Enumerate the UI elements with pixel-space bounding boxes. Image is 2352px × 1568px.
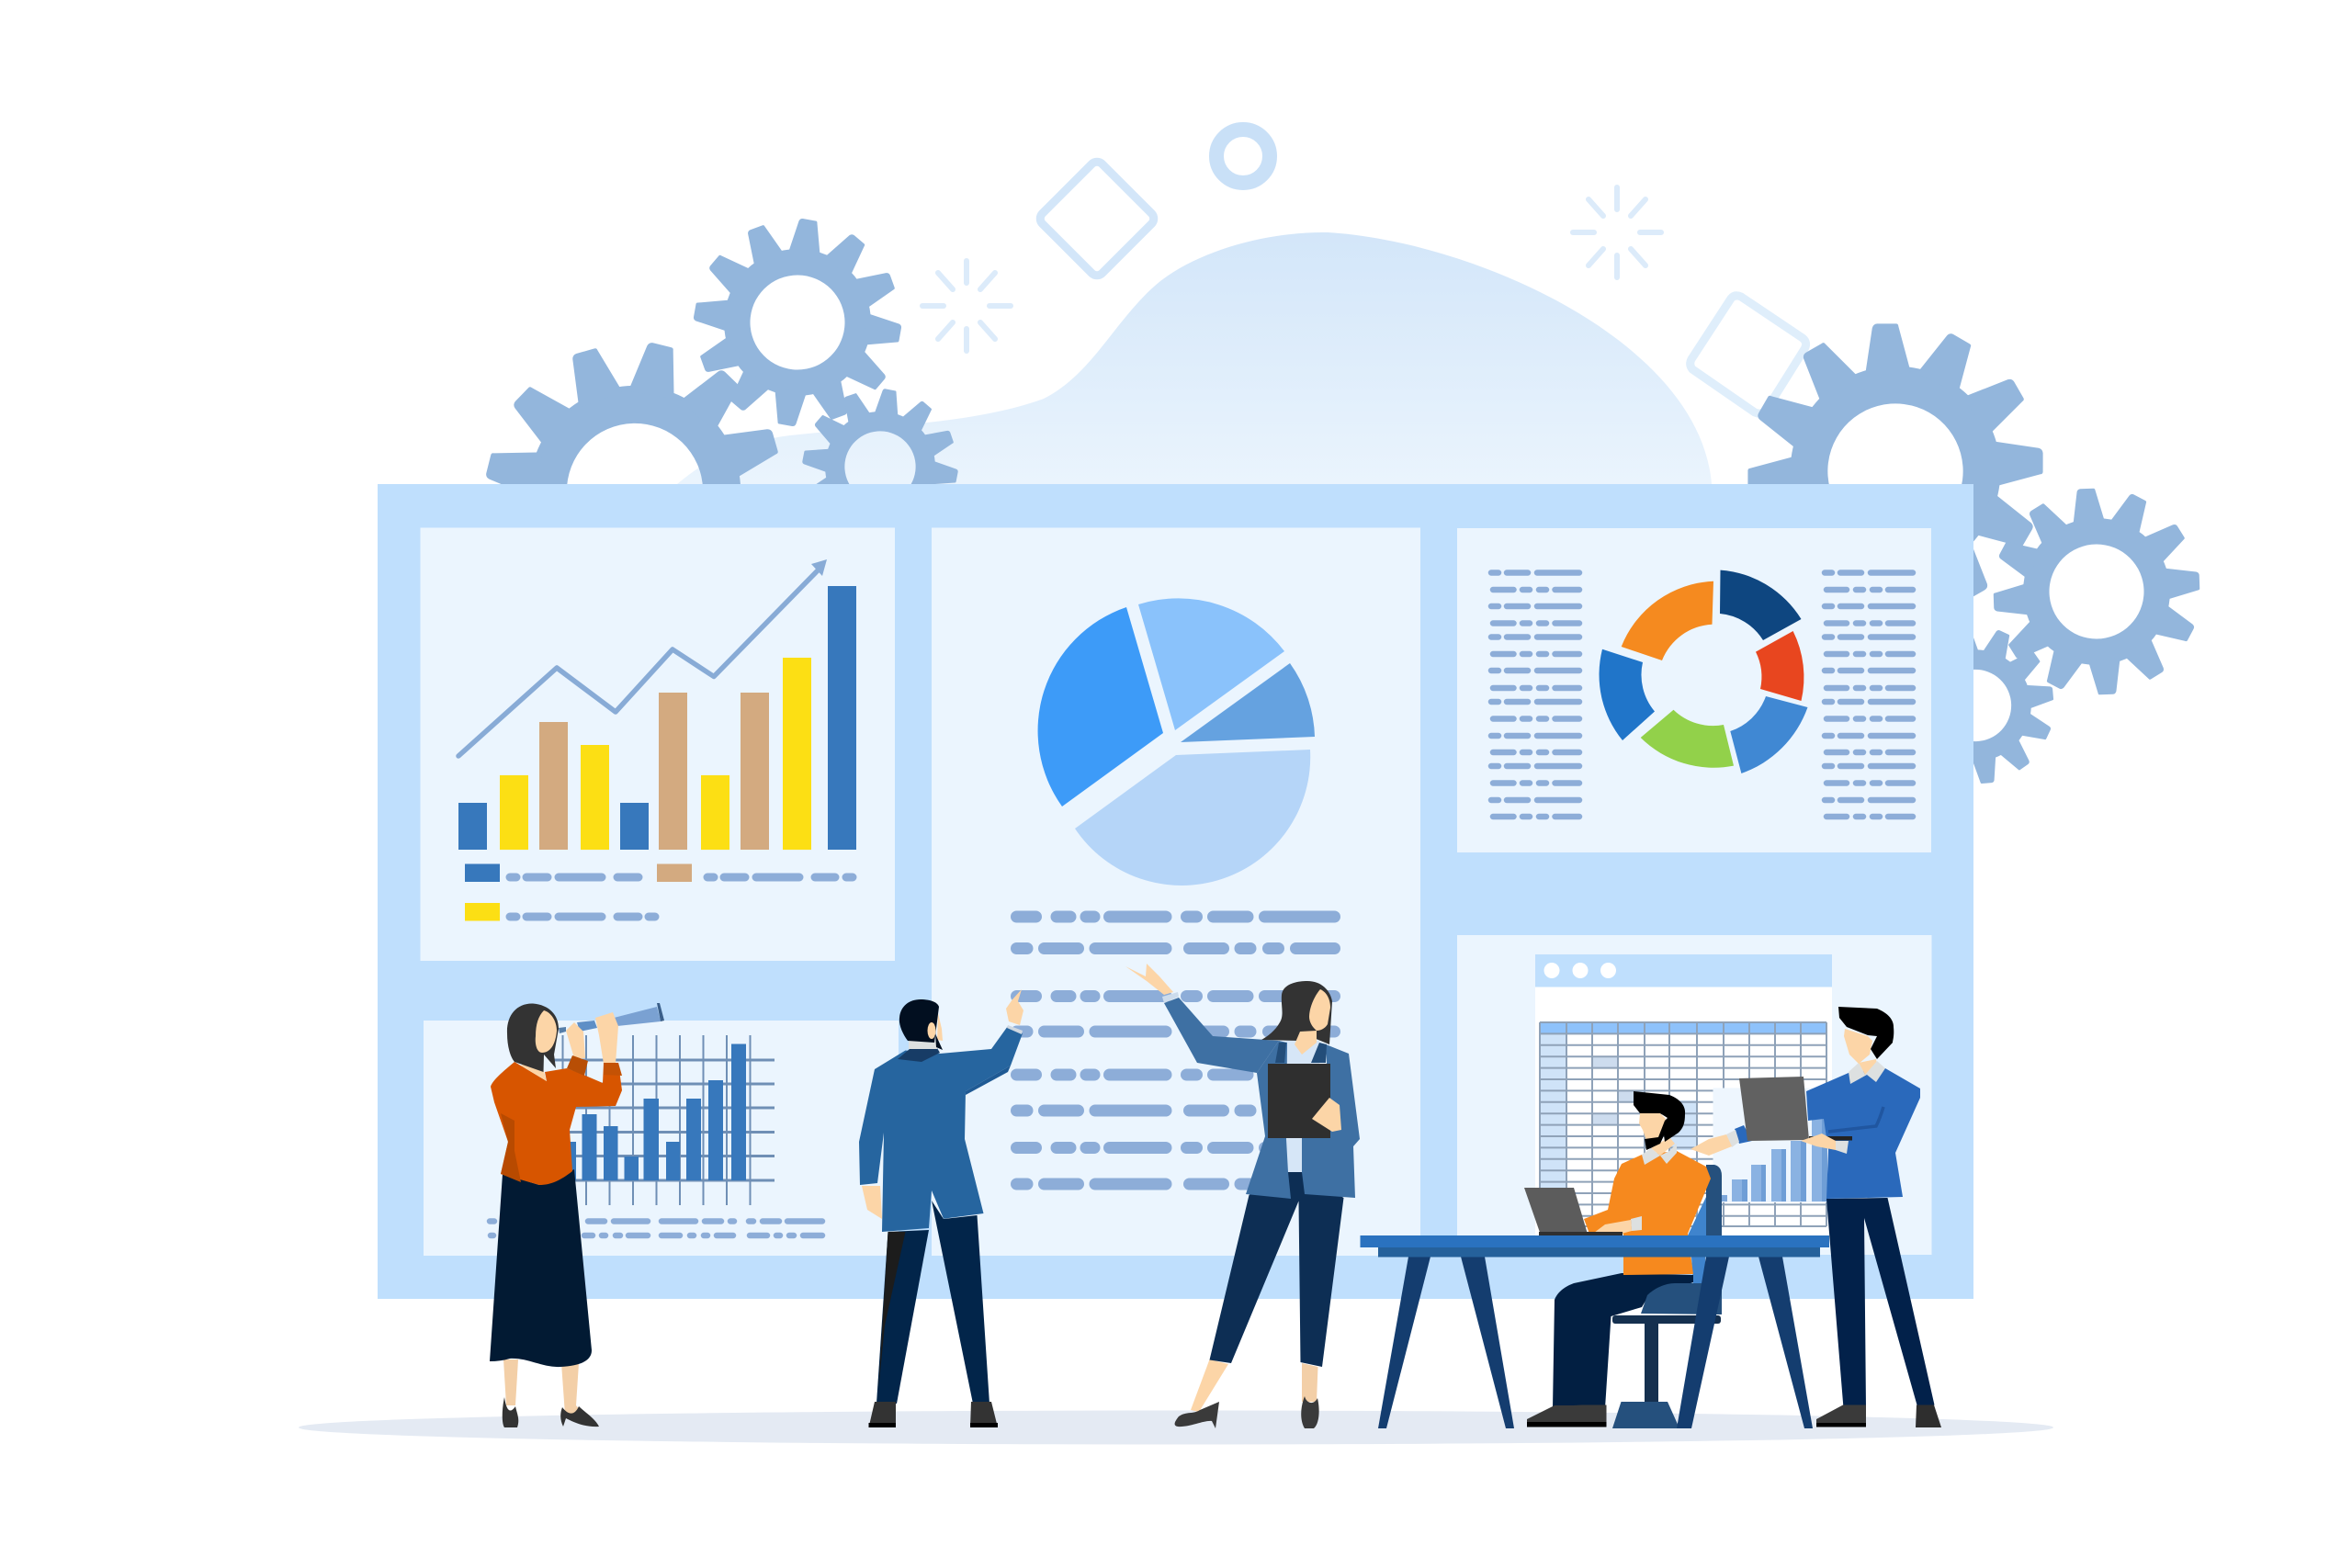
hair (1838, 1007, 1894, 1059)
dashboard board (378, 484, 1973, 1299)
chair seat and base (1612, 1283, 1721, 1428)
raised forearms (566, 1012, 618, 1064)
gear: large left (461, 318, 808, 665)
hair (507, 1003, 559, 1072)
face (1639, 1113, 1666, 1141)
table (1360, 1235, 1829, 1428)
table legs (1378, 1257, 1813, 1428)
pie chart (1038, 598, 1315, 886)
face (1309, 989, 1330, 1031)
hair (1634, 1091, 1685, 1142)
window (1535, 954, 1832, 1236)
legend (465, 863, 853, 920)
laptop (1524, 1188, 1623, 1236)
left hand (862, 1186, 882, 1219)
blouse (1286, 1041, 1319, 1172)
side text columns (1491, 573, 1913, 817)
hand under laptop (1801, 1134, 1849, 1154)
icon: decorative diamond left (1037, 159, 1157, 278)
donut chart (1600, 570, 1808, 773)
panel: spreadsheet window (1457, 935, 1931, 1255)
beard (1645, 1118, 1668, 1150)
collar (898, 1048, 940, 1062)
trousers (1826, 1198, 1935, 1408)
neck (1859, 1059, 1877, 1075)
icon: decorative ring (1216, 130, 1270, 183)
hand on keyboard (1594, 1216, 1642, 1234)
shoes (869, 1402, 998, 1427)
sweater (1806, 1068, 1920, 1199)
pointing hand (1690, 1134, 1732, 1156)
person: woman presenting with clipboard (1125, 964, 1360, 1428)
face (536, 1010, 557, 1053)
head (899, 999, 943, 1050)
background blob (677, 232, 1712, 484)
gear: large right (1737, 313, 2053, 629)
dark lapels (1275, 1043, 1327, 1063)
panel: bar chart with trend line (421, 527, 895, 961)
gear: far right (1983, 478, 2211, 705)
text lines (490, 1222, 822, 1235)
person: seated man with laptop (1524, 1091, 1711, 1427)
sweater (1584, 1151, 1711, 1275)
trousers (1553, 1273, 1693, 1408)
legs and heels (1175, 1172, 1343, 1428)
sleeve shading (1828, 1107, 1883, 1132)
grid chart (551, 1035, 775, 1205)
cuff (1726, 1130, 1739, 1147)
left sleeve (1735, 1125, 1752, 1144)
pointing hand (1006, 989, 1023, 1034)
legs and shoes (503, 1359, 599, 1427)
shoes (1816, 1405, 1941, 1427)
gear: top middle (684, 209, 911, 436)
sleeve shading (966, 1066, 1011, 1095)
hand on clipboard (1312, 1098, 1341, 1132)
trousers (876, 1201, 989, 1404)
person: woman with telescope (490, 1003, 664, 1427)
small bar chart card (1713, 1088, 1827, 1202)
gear: lower right behind panel (1873, 604, 2077, 807)
blazer (1246, 1041, 1360, 1199)
text lines (1016, 917, 1334, 1184)
shoes (1527, 1405, 1606, 1427)
icon: sparkle left (922, 261, 1011, 351)
table top (1360, 1235, 1829, 1247)
raised arm (1164, 998, 1279, 1073)
panel: pie chart and text (932, 527, 1420, 1256)
neck (1295, 1031, 1317, 1055)
bar chart (458, 586, 856, 850)
panel: donut chart (1457, 528, 1931, 852)
panel: lower left grid chart (424, 1021, 899, 1256)
telescope (559, 1003, 664, 1033)
icon: decorative square right (1690, 296, 1806, 413)
raised hand (1125, 964, 1179, 1003)
face (1844, 1029, 1872, 1064)
jacket (859, 1026, 1023, 1232)
skirt (490, 1169, 592, 1367)
trend line arrow (458, 559, 827, 756)
laptop (1739, 1077, 1852, 1141)
gear: small middle (794, 380, 967, 553)
blouse (491, 1055, 622, 1185)
ground shadow (299, 1411, 2053, 1444)
clipboard (1268, 1064, 1330, 1138)
neck (521, 1054, 547, 1081)
neck (1651, 1137, 1675, 1156)
icon: sparkle right (1573, 187, 1661, 277)
collar (1642, 1144, 1677, 1165)
person: standing man with laptop (1690, 1007, 1941, 1427)
person: man in blue suit pointing (859, 989, 1023, 1427)
chair back (1688, 1165, 1722, 1314)
collar (1849, 1061, 1885, 1084)
hair (1261, 981, 1332, 1044)
gears group (461, 209, 2211, 807)
spreadsheet table (1540, 1022, 1826, 1226)
